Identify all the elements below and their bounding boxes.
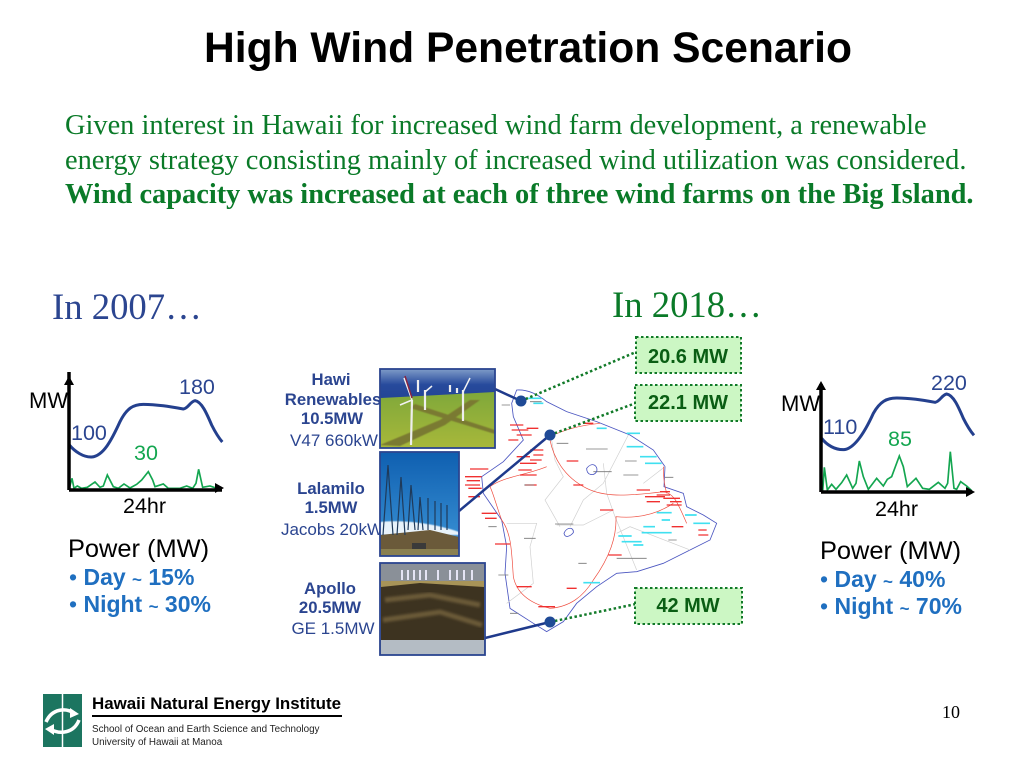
- label: Apollo: 20.5MW: [299, 598, 361, 617]
- title: High Wind Penetration Scenario: [204, 24, 852, 72]
- label: Apollo: GE 1.5MW: [291, 619, 375, 638]
- footer: affiliation: School of Ocean and Earth Science and Technology: [92, 724, 320, 735]
- label: Hawi Renewables: Renewables: [285, 390, 381, 409]
- chart: 2007 load and wind power: 30: [134, 441, 158, 465]
- chart: 2007 load and wind power: 100: [71, 421, 107, 445]
- volcano contours: [564, 465, 597, 536]
- label: Hawi Renewables: [285, 370, 381, 450]
- intro text block: Wind capacity was increased at each of three wind farms on the Big Island.: [65, 179, 974, 210]
- 2007 value labels: 180: [179, 375, 215, 399]
- text: 2007 power shares: • Day ~ 15%: [69, 564, 194, 590]
- heading: In 2007: In 2007…: [52, 286, 202, 327]
- red map labels: [465, 423, 708, 607]
- 2018 wind curve: [823, 452, 972, 492]
- text: 2007 power shares: Power (MW): [68, 535, 209, 563]
- label: Hawi Renewables: 10.5MW: [301, 409, 363, 428]
- label: Lalamilo: [281, 479, 383, 539]
- 2007 wind curve: [69, 469, 217, 488]
- footer: affiliation: University of Hawaii at Manoa: [92, 737, 223, 748]
- label: Hawi Renewables: Hawi: [312, 370, 350, 389]
- 2018 axes: [821, 384, 972, 492]
- marker: Lalamilo site: [544, 430, 556, 440]
- text: 2018 power shares: • Night ~ 70%: [820, 593, 962, 619]
- 2018 value labels: 220: [931, 371, 967, 395]
- label: Apollo: [291, 579, 375, 638]
- map: Big Island of Hawaii: [465, 390, 717, 632]
- intro text block: [65, 110, 974, 210]
- footer: affiliation: [92, 724, 320, 748]
- callout: 22.1 MW: [635, 385, 741, 421]
- page number: 10: [942, 702, 960, 722]
- connector: 2018 callout to Hawi: [521, 352, 636, 401]
- text: 2007 power shares: • Night ~ 30%: [69, 591, 211, 617]
- chart: 2018 load and wind power: 85: [888, 427, 912, 451]
- label: Apollo: Apollo: [304, 579, 356, 598]
- callout: 42 MW: [635, 588, 742, 624]
- callout: 42 MW: 42 MW: [656, 595, 720, 617]
- intro text block: Given interest in Hawaii for increased wind farm development, a renewable: [65, 110, 927, 141]
- text: 2018 power shares: Power (MW): [820, 537, 961, 565]
- connector: Lalamilo photo to map: [459, 435, 550, 511]
- 2007 demand curve: [69, 401, 222, 457]
- callout: 22.1 MW: 22.1 MW: [648, 392, 728, 414]
- cyan map labels: [528, 398, 710, 583]
- callout: 20.6 MW: 20.6 MW: [648, 346, 728, 368]
- photo: Apollo wind farm: [380, 563, 485, 655]
- footer: rule: [92, 715, 342, 717]
- connector: 2018 callout to Lalamilo: [550, 403, 636, 435]
- chart: 2018 load and wind power: [781, 371, 975, 521]
- 2018 demand curve: [822, 394, 974, 450]
- text: 2018 power shares: • Day ~ 40%: [820, 566, 945, 592]
- chart: 2018 load and wind power: 110: [823, 415, 857, 439]
- connector: Apollo photo to map: [485, 622, 550, 638]
- inland roads: [507, 435, 690, 603]
- marker: Hawi site: [516, 396, 526, 406]
- chart: 2007 load and wind power: 24hr: [123, 494, 166, 518]
- photo: Lalamilo wind farm: [380, 452, 459, 556]
- callout: 20.6 MW: [636, 337, 741, 373]
- photo: Hawi wind farm: [380, 369, 495, 448]
- label: Hawi Renewables: V47 660kW: [290, 431, 378, 450]
- heading: In 2018: In 2018…: [612, 284, 762, 325]
- chart: 2018 load and wind power: 24hr: [875, 497, 918, 521]
- highways: [490, 423, 687, 608]
- intro text block: energy strategy consisting mainly of increased wind utilization was considered.: [65, 145, 966, 176]
- text: 2007 power shares: [68, 535, 211, 617]
- 2007 axis labels: MW: [29, 388, 68, 413]
- island coastline: [482, 390, 717, 632]
- connector: Hawi photo to map: [495, 389, 521, 401]
- logo: Hawaii Natural Energy Institute: [43, 694, 82, 747]
- dark map labels: [488, 402, 677, 613]
- 2007 axes: [69, 372, 222, 490]
- label: Lalamilo: 1.5MW: [305, 498, 358, 517]
- text: 2018 power shares: [820, 537, 962, 619]
- label: Lalamilo: Jacobs 20kW: [281, 520, 383, 539]
- 2018 axis labels: MW: [781, 391, 820, 416]
- label: Lalamilo: Lalamilo: [297, 479, 365, 498]
- marker: Apollo site: [544, 616, 556, 628]
- chart: 2007 load and wind power: [29, 372, 224, 518]
- footer: institute name: Hawaii Natural Energy Institute: [92, 694, 341, 713]
- connector: 2018 callout to Apollo: [550, 604, 636, 622]
